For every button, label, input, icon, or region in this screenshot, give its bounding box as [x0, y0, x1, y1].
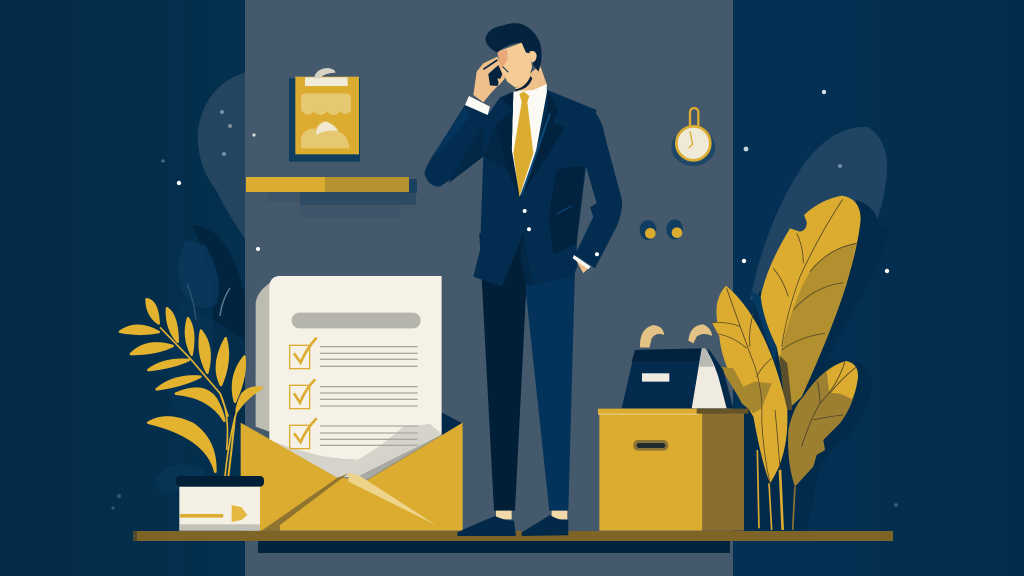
bag handles — [640, 325, 664, 348]
right lapel — [522, 90, 565, 197]
wall hooks — [640, 219, 683, 240]
document — [269, 276, 442, 460]
foliage shadow — [743, 200, 891, 530]
envelope flap highlight — [348, 473, 436, 525]
tie — [513, 92, 533, 197]
star dots — [111, 90, 898, 510]
left plant — [120, 299, 262, 477]
left lapel — [495, 92, 519, 196]
bag on box — [622, 324, 733, 408]
paper in bag — [708, 348, 733, 408]
bottom right leaf — [788, 361, 858, 487]
shoes — [457, 516, 516, 536]
wall clock — [671, 108, 715, 166]
cardboard box — [598, 409, 748, 531]
stems — [757, 450, 795, 530]
document title bar — [292, 313, 421, 328]
raised arm — [424, 97, 513, 187]
floor shadow — [258, 540, 730, 553]
lowered arm — [575, 110, 622, 268]
jacket pocket flap — [557, 206, 572, 214]
neck — [515, 65, 547, 97]
background blob left — [198, 72, 246, 240]
phone — [488, 65, 502, 86]
dark foliage behind left plant — [155, 225, 245, 492]
jacket buttons — [523, 209, 599, 256]
box handle — [633, 440, 668, 451]
shirt — [512, 84, 547, 197]
big leaf — [761, 196, 861, 410]
businessman — [424, 23, 622, 536]
envelope back — [440, 412, 463, 437]
socks — [496, 511, 512, 519]
bag body — [622, 348, 702, 408]
envelope body — [241, 423, 463, 531]
head — [497, 43, 532, 87]
left leaf — [712, 286, 787, 483]
jacket torso — [473, 90, 597, 287]
document back sheet — [256, 282, 310, 447]
wall shelf — [246, 177, 417, 218]
right plant — [712, 196, 891, 530]
wall clipboard — [289, 68, 360, 162]
floor — [133, 531, 893, 541]
ear — [529, 51, 537, 63]
legs — [457, 233, 576, 536]
document and envelope — [241, 276, 463, 531]
jacket shading — [548, 167, 585, 255]
wall panel — [245, 0, 733, 576]
hand — [473, 57, 505, 102]
shirt cuff — [465, 96, 490, 115]
hair — [485, 23, 542, 72]
background blob right — [750, 127, 887, 300]
envelope fold shadow — [262, 473, 348, 531]
checklist — [290, 338, 317, 449]
plant pot — [176, 476, 264, 531]
right hand in pocket — [575, 258, 588, 273]
